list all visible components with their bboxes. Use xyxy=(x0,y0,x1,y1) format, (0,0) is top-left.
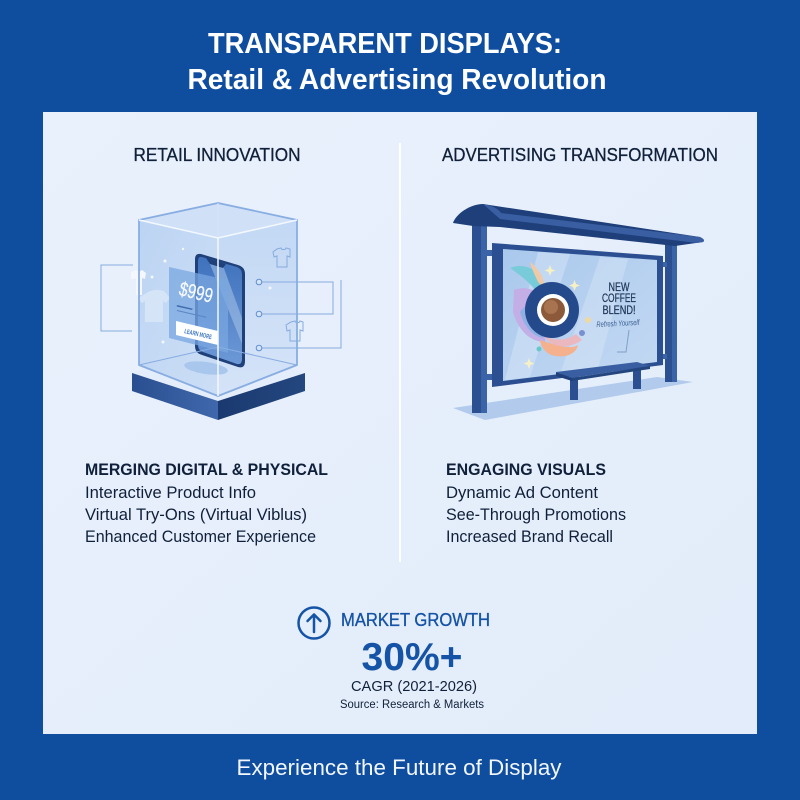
icon: up arrow in circle xyxy=(298,608,330,638)
left post xyxy=(472,224,487,413)
market growth callout xyxy=(298,608,490,711)
source: Source: Research & Markets xyxy=(340,699,484,711)
product info card xyxy=(169,267,228,353)
text block: engaging visuals: Increased Brand Recall xyxy=(446,527,613,546)
plinth xyxy=(132,345,305,420)
title xyxy=(188,28,606,96)
phone xyxy=(183,254,245,377)
ad copy: COFFEE xyxy=(602,291,636,305)
product info card: LEARN MORE xyxy=(184,328,213,341)
ad panel xyxy=(492,243,663,387)
text block: engaging visuals xyxy=(446,460,626,546)
title: TRANSPARENT DISPLAYS: xyxy=(208,28,562,60)
text block: engaging visuals: ENGAGING VISUALS xyxy=(446,460,606,479)
product info card: $999 xyxy=(177,278,215,308)
text block: merging digital and physical xyxy=(85,460,328,546)
text block: engaging visuals: See-Through Promotions xyxy=(446,505,626,524)
ground shadow xyxy=(453,377,693,420)
glass edges xyxy=(139,203,297,396)
glass faces xyxy=(139,347,297,396)
heading: retail innovation: RETAIL INNOVATION xyxy=(134,145,300,165)
heading: advertising transformation: ADVERTISING TRANSFORMATION xyxy=(442,145,718,165)
text block: merging digital and physical: MERGING DIGITAL & PHYSICAL xyxy=(85,460,328,479)
CAGR: CAGR (2021-2026) xyxy=(351,679,477,695)
text block: merging digital and physical: Enhanced Customer Experience xyxy=(85,527,316,546)
ad copy xyxy=(596,280,640,329)
brackets xyxy=(486,250,667,380)
label: MARKET GROWTH xyxy=(341,610,490,630)
title: Retail & Advertising Revolution xyxy=(188,64,606,96)
ad copy: Refresh Yourself xyxy=(596,318,640,329)
ad artwork: coffee cup xyxy=(510,262,591,369)
illustration: bus shelter advertising xyxy=(453,204,704,420)
main panel xyxy=(43,112,757,734)
side connector lines xyxy=(101,265,341,351)
ad copy: NEW xyxy=(608,280,630,294)
bench xyxy=(556,362,650,400)
illustration: transparent retail display case xyxy=(101,203,341,420)
shirt icons xyxy=(131,248,303,341)
roof xyxy=(453,204,704,246)
text block: merging digital and physical: Interactive Product Info xyxy=(85,483,256,502)
sparkles xyxy=(150,248,272,344)
text block: engaging visuals: Dynamic Ad Content xyxy=(446,483,598,502)
footer tagline: Experience the Future of Display xyxy=(236,755,562,780)
ad copy: BLEND! xyxy=(602,303,636,317)
text block: merging digital and physical: Virtual Try-Ons (Virtual Viblus) xyxy=(85,505,307,524)
statistic: 30%+ xyxy=(362,636,462,679)
right post xyxy=(665,243,677,382)
